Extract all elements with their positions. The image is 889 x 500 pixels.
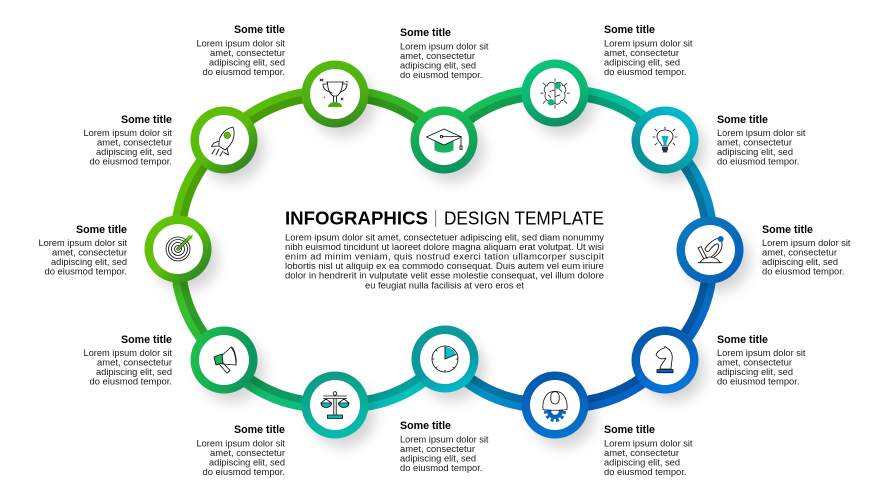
text block: rocket: do eiusmod tempor. [90,156,172,168]
icon: clock [432,346,458,372]
title [285,208,604,228]
text block: light bulb: amet, consectetur [717,138,793,148]
icon: graduation cap [426,129,462,153]
text block: megaphone [84,334,173,388]
text block: graduation cap: do eiusmod tempor. [400,70,482,81]
icon: chess knight [656,346,673,373]
text block: trophy: Some title [234,24,285,36]
text block: rocket [84,114,173,168]
icon: balance scales [321,392,349,418]
text block: clock: do eiusmod tempor. [400,463,482,474]
text block: trophy [196,24,286,78]
text block: clock: Lorem ipsum dolor sit [400,434,489,446]
text block: chess knight: amet, consectetur [717,358,793,368]
text block: scales: amet, consectetur [210,448,286,459]
text block: clock: Some title [400,420,451,432]
text block: brain: do eiusmod tempor. [604,67,686,78]
icon: megaphone [214,347,236,373]
text block: trophy: Lorem ipsum dolor sit [196,38,285,50]
node: rocket [190,106,264,182]
text block: helmet [604,424,693,478]
intro paragraph: eu feugiat nulla facilisis at vero eros et [365,280,524,292]
text block: trophy: adipiscing elit, sed [209,58,285,68]
text block: graduation cap [400,27,489,81]
node: megaphone [190,326,264,402]
text block: scales: do eiusmod tempor. [202,467,285,478]
text block: megaphone: Some title [121,334,172,346]
connecting ring path [178,93,710,405]
node: microscope [676,216,750,292]
text block: chess knight: Some title [717,334,768,346]
text block: graduation cap: adipiscing elit, sed [400,60,476,72]
text block: brain: adipiscing elit, sed [604,58,680,68]
intro paragraph: enim ad minim veniam, quis nostrud exerci tation ullamcorper suscipit [285,252,604,262]
text block: rocket: amet, consectetur [97,138,173,148]
text block: light bulb: do eiusmod tempor. [717,156,800,168]
text block: microscope: amet, consectetur [762,248,838,258]
text block: trophy: amet, consectetur [210,48,286,59]
text block: microscope: adipiscing elit, sed [762,257,838,268]
icon: light bulb [653,127,677,152]
text block: light bulb: Lorem ipsum dolor sit [717,128,806,139]
node: clock [412,326,485,401]
text block: megaphone: adipiscing elit, sed [96,367,172,378]
text block: microscope: do eiusmod tempor. [762,266,844,278]
text block: megaphone: amet, consectetur [97,358,173,368]
text block: graduation cap: amet, consectetur [400,51,476,62]
icon: target with dart [166,234,193,261]
text block: scales [196,424,286,478]
node: scales [302,372,375,447]
text block: helmet: Lorem ipsum dolor sit [604,438,693,450]
text block: target: Lorem ipsum dolor sit [38,238,127,249]
text block: trophy: do eiusmod tempor. [202,67,285,78]
text block: clock [400,420,489,474]
text block: microscope [762,224,851,278]
text block: brain: Lorem ipsum dolor sit [604,38,693,50]
text block: scales: Some title [234,424,285,436]
node: brain [522,60,595,135]
text block: scales: adipiscing elit, sed [209,458,285,468]
text block: brain [604,24,693,78]
text block: helmet: amet, consectetur [604,448,680,459]
text block: megaphone: do eiusmod tempor. [90,376,172,388]
text block: chess knight: do eiusmod tempor. [717,376,800,388]
icon: trophy [320,79,348,107]
node: trophy [302,60,375,136]
title: DESIGN TEMPLATE [444,208,604,228]
text block: light bulb: Some title [717,114,768,126]
text block: brain: Some title [604,24,655,36]
icon: brain [541,79,569,108]
node: helmet and gear [522,372,595,447]
text block: rocket: Some title [121,114,172,126]
text block: target: Some title [76,224,127,236]
intro paragraph: lobortis nisl ut aliquip ex ea commodo consequat. Duis autem vel eum iriure [285,261,604,272]
text block: light bulb [717,114,806,168]
icon: rocket [212,127,234,156]
text block: target [38,224,128,278]
text block: rocket: Lorem ipsum dolor sit [84,128,172,139]
node: light bulb [632,106,705,182]
node: chess knight [632,326,705,402]
icon: helmet and gear [543,391,567,420]
icon: microscope [698,236,724,263]
text block: megaphone: Lorem ipsum dolor sit [84,348,172,359]
text block: target: amet, consectetur [52,248,128,258]
text block: graduation cap: Some title [400,27,451,39]
node: target [144,216,218,291]
text block: chess knight: adipiscing elit, sed [717,367,793,378]
text block: chess knight [717,334,806,388]
text block: target: adipiscing elit, sed [51,257,127,268]
text block: scales: Lorem ipsum dolor sit [196,438,285,450]
text block: rocket: adipiscing elit, sed [96,147,172,158]
text block: graduation cap: Lorem ipsum dolor sit [400,42,489,52]
text block: microscope: Lorem ipsum dolor sit [762,238,851,249]
text block: helmet: adipiscing elit, sed [604,458,680,468]
text block: microscope: Some title [762,224,813,236]
intro paragraph: Lorem ipsum dolor sit amet, consectetuer adipiscing elit, sed diam nonummy [285,232,604,244]
title: INFOGRAPHICS [285,208,428,228]
text block: brain: amet, consectetur [604,48,680,59]
node: graduation cap [410,106,484,182]
text block: helmet: do eiusmod tempor. [604,467,686,478]
intro paragraph: nibh euismod tincidunt ut laoreet dolore magna aliquam erat volutpat. Ut wisi [285,242,604,253]
text block: target: do eiusmod tempor. [44,266,127,278]
intro paragraph: dolor in hendrerit in vulputate velit esse molestie consequat, vel illum dolore [285,270,604,282]
intro paragraph [285,232,604,292]
text block: clock: adipiscing elit, sed [400,454,476,464]
text block: chess knight: Lorem ipsum dolor sit [717,348,806,359]
text block: light bulb: adipiscing elit, sed [717,147,793,158]
text block: helmet: Some title [604,424,655,436]
text block: clock: amet, consectetur [400,444,476,455]
